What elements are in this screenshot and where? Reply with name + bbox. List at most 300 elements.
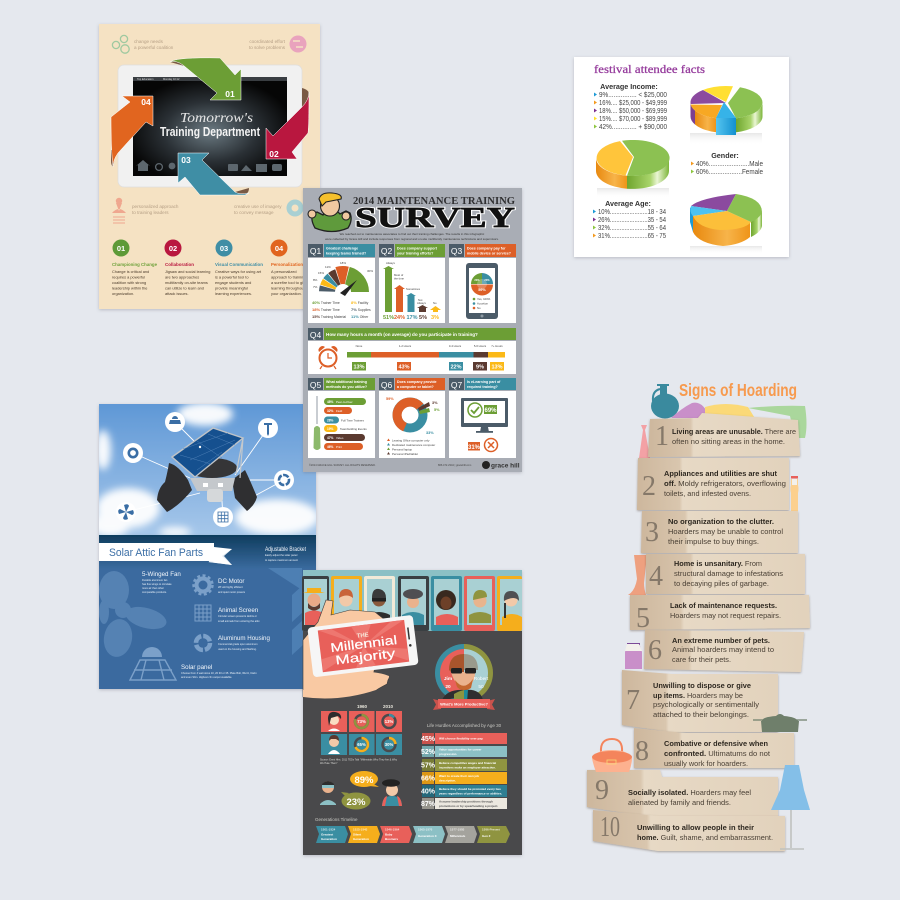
poster: Solar Attic Fan Parts [90,402,319,689]
life hurdles list: 52% [421,749,436,756]
survey footer: 866.472.2344 | gracehill.com [438,463,471,467]
Q5 panel: 46% [327,445,334,449]
box 4: 4 [649,561,663,592]
step columns: Personalization [271,262,303,268]
survey title: SURVEY [355,203,515,234]
generations timeline: 1901-1924 [321,828,336,832]
gender list: 40%.......................Male [696,159,763,168]
watermark shapes [99,568,303,659]
poster: The Millennial Majority [302,570,522,855]
box 4: structural damage to infestations [674,569,783,578]
box 9: 9 [595,775,609,806]
step columns: Collaboration [165,262,194,268]
gender pie [596,140,670,198]
phone with title: Majority [335,646,397,668]
Q4 panel: None [356,344,363,348]
poster: Tomorrow's Training Department [99,24,320,309]
box 10: 10 [600,812,620,843]
part descriptions: used on the housing and flashing. [218,647,257,651]
part descriptions: Commercial grade spun aluminum [218,642,258,646]
1960 vs 2010 grid: 2010 [383,704,394,709]
box 9 [587,770,778,817]
Q7 panel: Q7 [451,380,462,390]
box 4: to decaying piles of garbage. [674,579,769,588]
Q5 panel: Video [336,436,344,440]
box 7: 7 [626,685,640,716]
average income list: 15%.... $70,000 - $89,999 [599,114,667,123]
step columns: Jigsaw and social learning [165,269,210,274]
Q1 panel: keeping teams trained? [326,252,366,256]
part descriptions: comparable products. [142,590,167,594]
life hurdles list: Believe they should be promoted every two [439,787,501,791]
step columns: 03 [220,244,228,253]
Q1 panel: Greatest challenge [326,246,358,250]
festival title: festival attendee facts [594,64,706,76]
Q4 panel: Q4 [310,330,321,340]
average income list [594,82,667,131]
step columns: requires a powerful [112,274,145,280]
gender list [691,151,763,176]
generations timeline: Boomers [385,837,398,841]
life hurdles list: Life Hurdles Accomplished by Age 30 [427,723,502,728]
part descriptions: has five wings to circulate [142,582,172,586]
life hurdles list: 87% [421,801,436,808]
Q6 panel: 59% [386,397,394,401]
generations timeline: Generation [321,837,337,841]
box 5: 5 [636,603,650,634]
Q1 panel: 15% [318,271,324,275]
generations timeline: 1977-1995 [450,828,465,832]
average age list [593,199,666,240]
life hurdles list: Value opportunities for career [439,748,482,752]
part descriptions: Circular screen prevents debris or [218,614,257,618]
step columns: organization. [112,291,134,296]
Q5 panel: 32% [327,409,334,413]
survey title: We reached out to maintenance associates to find out their training challenges. The results in this infographic [340,232,485,236]
box 3 [641,511,798,553]
infographic: Signs of Hoarding [587,380,810,851]
Q3 panel: 20% [484,278,490,282]
step columns: your organization. [271,291,302,296]
1960 vs 2010 grid: 13% [385,719,393,724]
survey title: 2014 MAINTENANCE TRAINING [353,196,515,207]
1960 vs 2010 grid: We Hate Them" [320,762,338,765]
Q7 panel: required training? [467,385,498,389]
box 3: 3 [645,517,659,548]
generations timeline: Greatest [321,832,333,836]
Q3 panel: Does company pay for [467,246,506,250]
title: Signs of Hoarding [679,380,797,400]
step columns: is a powerful tool to [215,274,249,280]
tablet with screen: Training Department [160,124,261,139]
box 10 [593,810,785,851]
Q5 panel: Full Time Trainers [341,418,365,422]
box 3: No organization to the clutter. [668,517,774,526]
box 7: up items. Hoarders may be [653,691,743,700]
arrow 03 teal [178,153,249,195]
step columns: coalition with strong [112,280,146,285]
Q1 panel: 8% [313,278,318,282]
survey title: SURVEY [355,203,515,234]
Q5 panel: methods do you utilize? [326,385,367,389]
Q7 panel: Is eLearning part of [467,380,501,384]
generations timeline: Generations Timeline [315,817,358,822]
ribbon heading: Solar Attic Fan Parts [109,547,204,559]
step columns: attack issues. [165,291,189,296]
step columns: 04 [275,244,284,253]
Q4 panel: 3-4 Hours [449,344,462,348]
screwdriver [316,396,318,424]
alarm clock [319,346,337,369]
Q2 panel: Sometimes [406,287,421,291]
part descriptions: 5-Winged Fan [142,571,181,578]
part descriptions: 28 volt highly efficient [218,585,243,589]
box 6: Animal hoarders may intend to [672,645,774,654]
Q3 panel: mobile device or service? [467,252,511,256]
box 9: Socially isolated. Hoarders may feel [628,788,751,797]
part descriptions: Adjustable Bracket [265,546,306,553]
Q4 panel: 13% [353,364,365,370]
Q2 panel: Not [418,298,423,302]
life hurdles list: incentives make an employer attractive. [439,766,496,770]
generations timeline: 1925-1945 [353,828,368,832]
survey footer [309,461,520,470]
life hurdles list: 45% [421,736,436,743]
box 2: 2 [642,471,656,502]
step columns: can utilize to learn and [165,286,204,290]
part descriptions: Solar panel [181,664,212,671]
generations timeline: 1946-1964 [385,828,400,832]
Q1 panel: 11% [325,265,331,269]
average income list: Average Income: [600,82,658,91]
Q1 panel [308,244,375,323]
Q2 panel: 17% [406,315,418,321]
Q1 panel: 18% [340,261,346,265]
tablet with screen: Top Education [137,77,154,81]
box 7 [622,670,778,732]
life hurdles list: promotions or by spearheading a project. [439,804,498,808]
step columns: Championing Change [112,262,157,268]
part descriptions: Animal Screen [218,607,259,614]
step columns: engage students and [215,280,251,285]
step columns [112,240,309,296]
step columns: multifamily on-site teams [165,280,208,285]
life hurdles list: progression. [439,752,457,756]
average age list: 10%.......................18 - 34 [598,207,666,216]
part descriptions: and quiet motor powers [218,590,246,594]
Q3 panel [449,244,516,323]
average age list: 32%.......................55 - 64 [598,223,666,232]
Q4 panel: 9% [476,364,484,370]
feature notes around tablet: creative use of imagery [234,204,282,209]
box 8: usually work for hoarders. [664,759,748,768]
generations timeline: Generation [353,837,369,841]
survey title: were collected by Grace Hill and include responses from regional and on-site multifamily maintenance technicians and supervisors. [325,237,499,241]
average income list: 18%.... $50,000 - $69,999 [599,106,667,115]
Q4 panel [308,328,516,374]
productivity portrait: 50 [478,684,484,690]
Q3 panel: A portion [477,302,488,306]
arrow 04 orange [111,96,153,167]
box 5: Hoarders may not request repairs. [670,611,781,620]
Q5 panel: Q5 [310,380,321,390]
box 8: confronted. Ultimatums do not [664,749,770,758]
Q4 panel: 1-2 Hours [399,344,412,348]
Q1 panel: Q1 [310,246,321,256]
generations timeline: Baby [385,832,393,836]
Q2 panel: Most of [394,273,403,277]
Q4 panel: 43% [398,364,410,370]
life hurdles list: Believe competitive wages and financial [439,761,496,765]
feature notes around tablet: a powerful coalition [134,45,174,50]
step columns: leadership within the [112,286,147,290]
Q6 panel: Leasing Office computer only [392,438,430,442]
speech bubbles [320,771,402,810]
poster: festival attendee facts [574,57,789,257]
gender list: 60%...................Female [696,167,763,176]
Q5 panel: 48% [327,400,334,404]
box 4 [646,554,805,594]
productivity portrait: Robert [474,676,489,682]
Q2 panel: 5% [419,315,427,321]
Q2 panel: Always [417,301,426,305]
background objects [625,384,806,669]
speech bubbles: 23% [346,797,366,808]
Q4 panel: 7+ Hours [491,344,503,348]
mascot [308,193,351,232]
Q3 panel: 59% [478,288,486,292]
step columns: Visual Communication [215,262,263,268]
box 6: An extreme number of pets. [672,636,770,645]
Q6 panel: 3% [432,401,438,405]
solar fan device [126,422,284,517]
Q5 panel: What additional training [326,380,367,384]
survey footer: grace hill [491,462,520,470]
generations timeline: Gen Z [482,834,491,838]
portrait phone cards [302,576,522,631]
tablet with screen [118,65,302,187]
part icons on blue [130,576,212,680]
1960 vs 2010 grid: 1960 [357,704,368,709]
step columns: are two approaches [165,274,199,280]
1960 vs 2010 grid: Source: Ernst Hire, 2011 TEDx Talk "Millennials Who They Are & Why [320,758,398,762]
productivity portrait [433,644,495,710]
feature notes around tablet: to training leaders [132,210,169,215]
box 8: Combative or defensive when [664,739,768,748]
Q3 panel: Yes, 100% [477,297,491,301]
Q2 panel: your training efforts? [397,252,433,256]
Q6 panel: Dedicated maintenance computer [392,443,435,447]
Q2 panel: 51% [383,315,394,321]
Q5 panel: Teambuilding Events [340,427,367,431]
box 2 [637,458,789,510]
Q6 panel: a computer or tablet? [397,385,434,389]
Q5 panel: Field [336,409,343,413]
box 3: their impulse to buy things. [668,537,759,546]
box 1 [648,413,800,457]
part descriptions [142,546,306,679]
feature notes around tablet: personalized approach [132,204,179,209]
box 3: Hoarders may be unable to control [668,527,783,536]
age pie [690,194,762,254]
box 5: Lack of maintenance requests. [670,601,777,610]
box 7: attached to their belongings. [653,710,749,719]
phone with title [307,615,419,677]
Q3 panel: Q3 [451,246,462,256]
average income list: 16%.... $25,000 - $49,999 [599,98,667,107]
Q2 panel: 3% [431,315,439,321]
ribbon heading [99,543,232,565]
average age list: 26%.......................35 - 54 [598,215,666,224]
Q5 panel: 28% [327,418,334,422]
step columns: learning throughout [271,286,305,290]
feature notes around tablet: change needs [134,39,164,44]
step columns: learning experiences. [215,291,252,296]
life hurdles list: description. [439,778,456,782]
tablet with screen: Monday 10:12 [163,77,180,81]
part descriptions: Aluminum Housing [218,635,270,642]
step columns: provide meaningful [215,286,248,290]
Q2 panel [379,244,445,323]
box 8 [634,728,794,768]
arrow 02 red: 02 [269,149,279,159]
part descriptions: Durable aluminum fan [142,578,168,582]
Q7 panel: 69% [484,408,497,414]
phone with title: Millennial [330,633,398,655]
life hurdles list: Assume leadership positions through [439,800,493,804]
tablet with screen: Tomorrow's [180,111,254,126]
step columns: approach to training is [271,274,309,280]
Q1 panel: 15% Training Material [312,314,346,319]
feature notes around tablet: to convey message [234,210,274,215]
box 1: Living areas are unusable. There are [672,427,796,436]
productivity portrait: 20 [445,684,451,690]
part descriptions: to capture maximum amount [265,558,298,562]
part descriptions: DC Motor [218,578,244,585]
step columns: 02 [169,244,177,253]
foreground objects: pot, purse, lamp [592,714,810,849]
arrow 01 green: 01 [225,89,235,99]
box 9: alienated by family and friends. [628,798,731,807]
Q1 panel: 18% Trainer Time [312,307,340,312]
1960 vs 2010 grid: 65% [357,742,366,747]
part descriptions: Easily adjust the solar panel [265,553,298,557]
clouds [90,402,319,537]
box 5 [630,595,810,634]
Q2 panel: Always [386,261,395,265]
life hurdles list: 57% [421,762,436,770]
Q1 panel: 7% [313,285,318,289]
box 7: Unwilling to dispose or give [653,681,751,690]
box 10: home. Guilt, shame, and embarrassment. [637,833,773,842]
Q5 panel [308,378,375,458]
part descriptions: Choose from 4 watt sizes 10, 20 30 or 35. Plate Bolt, Wurtz, Darin [181,671,257,675]
life hurdles list: years regardless of performance or abilities. [439,792,502,796]
life hurdles list: 66% [421,776,436,782]
feature notes around tablet: coordinated effort [249,39,286,44]
Q5 panel: 47% [327,436,334,440]
Q1 panel: 7% Supplies [351,307,371,312]
1960 vs 2010 grid: 73% [357,719,366,724]
box 7: psychologically or sentimentally [653,700,759,709]
Q6 panel: 5% [434,408,440,412]
Q1 panel: 11% Other [351,314,368,319]
speech bubbles: 89% [354,775,374,786]
Q6 panel: Q6 [381,380,392,390]
gender list: Gender: [711,151,739,160]
box 2: off. Moldy refrigerators, overflowing [664,479,786,488]
generations timeline: Silent [353,832,361,836]
step columns: A personalized [271,269,297,274]
box 6: care for their pets. [672,655,731,664]
survey title [325,196,515,241]
Q2 panel: 24% [394,315,405,321]
step columns: Creative ways for using art [215,269,262,274]
app icons [136,160,282,172]
step columns: a surefire tool to give [271,280,307,285]
step columns: Change is critical and [112,269,149,274]
feature notes around tablet [112,35,306,223]
Q6 panel [379,378,445,458]
life hurdles list: Want to create their own job [439,774,479,778]
poster: 2014 Maintenance Training Survey [303,188,522,472]
Q2 panel: Q2 [381,246,392,256]
1960 vs 2010 grid: 30% [385,742,393,747]
survey footer: ©2014 GRACE HILL SURVEY. ALL RIGHTS RESERVED. [309,463,376,467]
arrow 03 teal: 03 [181,155,191,165]
Q5 panel: Peer-to-Peer [336,400,353,404]
generations timeline: 1996-Present [482,828,500,832]
box 6: 6 [648,635,662,666]
part icon circles [116,412,294,527]
Q1 panel: 8% Facility [351,300,368,305]
Q4 panel: 22% [450,364,462,370]
Q5 panel: Print [336,445,342,449]
Q7 panel [449,378,516,458]
part descriptions: small animals from entering the attic. [218,619,261,623]
Q5 panel: 19% [327,427,334,431]
productivity portrait: Jim [444,676,452,682]
Q7 panel: 31% [468,445,481,451]
average age list: Average Age: [605,199,651,208]
Q1 panel: 40% Trainer Time [312,300,340,305]
Q6 panel: 33% [426,431,434,435]
Q2 panel: No [433,301,437,305]
average income list: 42%.............. + $90,000 [599,122,667,131]
arrow 04 orange: 04 [141,97,151,107]
box 6 [644,630,804,672]
arrow 01 green [170,58,241,100]
Q4 panel: 5-6 Hours [474,344,487,348]
box 8: 8 [635,736,649,767]
box 2: Appliances and utilities are shut [664,469,778,478]
box 1: 1 [655,421,669,452]
box 4: Home is unsanitary. From [674,559,762,568]
life hurdles list: Will choose flexibility over pay. [439,736,483,740]
life hurdles list [421,723,507,809]
Q6 panel: Personal laptop [392,448,412,452]
generations timeline: Millennials [450,834,466,838]
feature notes around tablet: to solve problems [249,45,286,50]
productivity portrait: What's More Productive? [440,702,488,706]
box 1: often no sitting areas in the home. [672,437,785,446]
Q6 panel: Personal iPad/tablet [392,452,418,456]
phone with title: THE [356,632,369,640]
Q2 panel: the time [394,276,404,280]
Q1 panel: 30% [367,269,373,273]
Q2 panel: Does company support [397,246,438,250]
step columns: 01 [117,244,125,253]
